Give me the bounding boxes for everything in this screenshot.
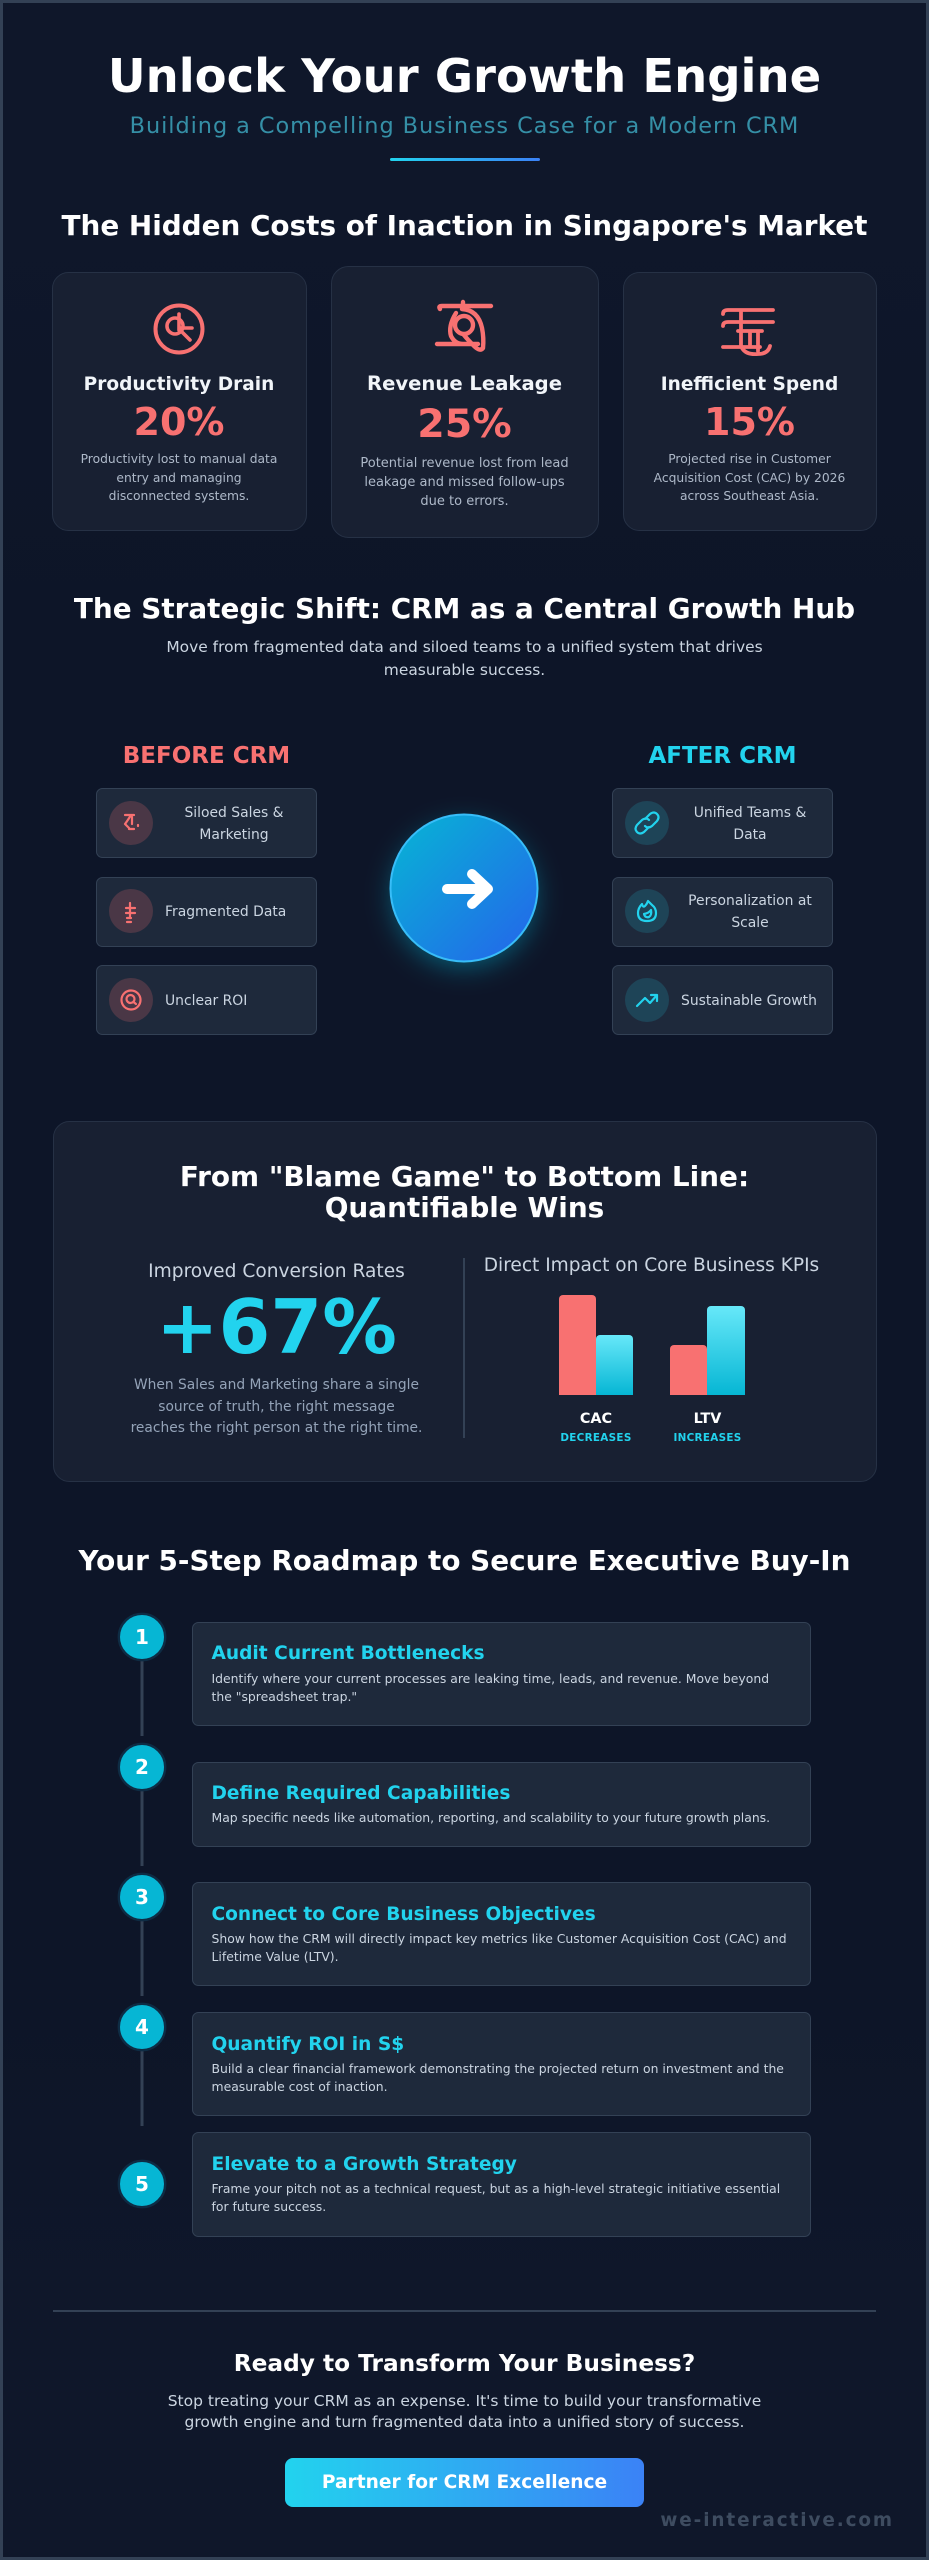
icon: link xyxy=(636,812,658,834)
card description: Potential revenue lost from lead xyxy=(360,456,569,471)
CTA button: Partner for CRM Excellence xyxy=(322,2472,607,2493)
conversion label: Improved Conversion Rates xyxy=(148,1261,405,1282)
step 3: Lifetime Value (LTV). xyxy=(212,1949,339,1964)
panel: productivity drain xyxy=(52,272,306,530)
bar chart: INCREASES xyxy=(673,1432,742,1444)
item: siloed sales xyxy=(96,788,316,858)
conversion description: When Sales and Marketing share a single xyxy=(134,1377,419,1393)
step 3 xyxy=(119,1874,811,1996)
subtitle: Building a Compelling Business Case for a Modern CRM xyxy=(130,113,799,139)
step 3: 3 xyxy=(135,1885,149,1909)
icon: revenue xyxy=(437,302,491,350)
step 2: Define Required Capabilities xyxy=(212,1783,510,1804)
item: siloed sales: Siloed Sales & xyxy=(184,805,284,821)
item: sustainable growth: Sustainable Growth xyxy=(681,993,817,1009)
item: unclear ROI xyxy=(96,966,316,1034)
card description: due to errors. xyxy=(420,494,509,509)
CTA button xyxy=(285,2458,644,2507)
card stat: 20% xyxy=(134,400,224,444)
item: unified teams: Data xyxy=(733,827,767,843)
step 2 xyxy=(119,1744,811,1866)
icon: siloed xyxy=(125,815,138,829)
card description: disconnected systems. xyxy=(109,489,249,503)
step 3: Connect to Core Business Objectives xyxy=(212,1904,596,1925)
card description: entry and managing xyxy=(116,471,242,485)
card description: across Southeast Asia. xyxy=(680,489,819,503)
bar chart: CAC xyxy=(580,1411,612,1427)
icon: trend up xyxy=(637,995,657,1006)
step 1 xyxy=(119,1614,811,1736)
step 1: the "spreadsheet trap." xyxy=(212,1689,357,1704)
call to action xyxy=(168,2350,761,2507)
card title: Productivity Drain xyxy=(84,374,274,395)
bar chart: DECREASES xyxy=(560,1432,632,1444)
card description: Projected rise in Customer xyxy=(668,452,832,466)
icon: spend xyxy=(723,310,773,354)
conversion description: reaches the right person at the right time. xyxy=(131,1420,422,1436)
item: fragmented data xyxy=(96,878,316,946)
CTA heading: Ready to Transform Your Business? xyxy=(234,2350,695,2377)
step 4: 4 xyxy=(135,2015,149,2039)
step 3: Show how the CRM will directly impact key metrics like Customer Acquisition Cost (CAC) and xyxy=(212,1931,787,1946)
card description: Productivity lost to manual data xyxy=(81,452,277,466)
step 5: Frame your pitch not as a technical request, but as a high-level strategic initiative essential xyxy=(212,2181,780,2196)
heading: strategic shift: The Strategic Shift: CRM as a Central Growth Hub xyxy=(74,592,855,625)
bar chart xyxy=(559,1295,745,1444)
wins heading: Quantifiable Wins xyxy=(325,1191,604,1224)
header xyxy=(108,49,821,161)
item: personalization: Personalization at xyxy=(688,893,812,909)
step 1: 1 xyxy=(135,1625,149,1649)
step 2: Map specific needs like automation, reporting, and scalability to your future growth plans. xyxy=(212,1810,770,1825)
CTA text: Stop treating your CRM as an expense. It's time to build your transformative xyxy=(168,2392,761,2410)
card stat: 15% xyxy=(704,400,795,444)
bar chart: LTV xyxy=(694,1411,722,1427)
before heading: BEFORE CRM xyxy=(123,743,290,769)
panel: revenue leakage xyxy=(332,266,598,538)
item: personalization: Scale xyxy=(731,915,769,931)
title: Unlock Your Growth Engine xyxy=(108,49,821,103)
item: unclear ROI: Unclear ROI xyxy=(165,993,247,1009)
step 5: for future success. xyxy=(212,2199,326,2214)
CTA text: growth engine and turn fragmented data into a unified story of success. xyxy=(185,2413,744,2431)
step 5: Elevate to a Growth Strategy xyxy=(212,2154,517,2175)
wins heading: From "Blame Game" to Bottom Line: xyxy=(180,1160,749,1193)
panel: quantifiable wins xyxy=(54,1122,876,1482)
icon: flame xyxy=(638,901,656,921)
timeline xyxy=(119,1614,811,2236)
conversion description: source of truth, the right message xyxy=(158,1399,395,1415)
heading: roadmap: Your 5-Step Roadmap to Secure Executive Buy-In xyxy=(78,1544,850,1577)
step 4: Quantify ROI in S$ xyxy=(212,2034,404,2055)
KPI label: Direct Impact on Core Business KPIs xyxy=(484,1255,819,1276)
card title: Inefficient Spend xyxy=(661,374,838,395)
step 1: Audit Current Bottlenecks xyxy=(212,1643,485,1664)
panel: after CRM xyxy=(612,743,832,1034)
conversion stat: +67% xyxy=(156,1284,397,1371)
card description: Acquisition Cost (CAC) by 2026 xyxy=(654,471,846,485)
item: sustainable growth xyxy=(612,966,832,1034)
item: fragmented data: Fragmented Data xyxy=(165,904,286,920)
icon: productivity xyxy=(156,306,202,352)
after heading: AFTER CRM xyxy=(648,743,797,769)
step 4: Build a clear financial framework demonstrating the projected return on investment and the xyxy=(212,2061,784,2076)
step 4: measurable cost of inaction. xyxy=(212,2079,388,2094)
item: personalization xyxy=(612,878,832,946)
heading: hidden costs: The Hidden Costs of Inaction in Singapore's Market xyxy=(62,209,868,242)
strategic shift intro: measurable success. xyxy=(384,661,545,679)
header rule xyxy=(390,158,540,161)
step 2: 2 xyxy=(135,1755,149,1779)
watermark: we-interactive.com xyxy=(660,2510,894,2531)
panel: before CRM xyxy=(96,743,316,1034)
step 4 xyxy=(119,2004,811,2126)
step 5 xyxy=(119,2132,811,2236)
panel: inefficient spend xyxy=(624,272,876,530)
item: unified teams: Unified Teams & xyxy=(694,805,806,821)
strategic shift intro: Move from fragmented data and siloed teams to a unified system that drives xyxy=(166,638,763,656)
card description: leakage and missed follow-ups xyxy=(364,475,565,490)
item: siloed sales: Marketing xyxy=(199,827,269,843)
icon: fragmented xyxy=(126,903,135,922)
card stat: 25% xyxy=(417,401,512,447)
icon: hub arrow xyxy=(390,814,538,966)
icon: unclear ROI xyxy=(122,990,140,1010)
step 5: 5 xyxy=(135,2172,149,2196)
card title: Revenue Leakage xyxy=(367,372,562,395)
item: unified teams xyxy=(612,788,832,858)
step 1: Identify where your current processes are leaking time, leads, and revenue. Move beyond xyxy=(212,1671,769,1686)
